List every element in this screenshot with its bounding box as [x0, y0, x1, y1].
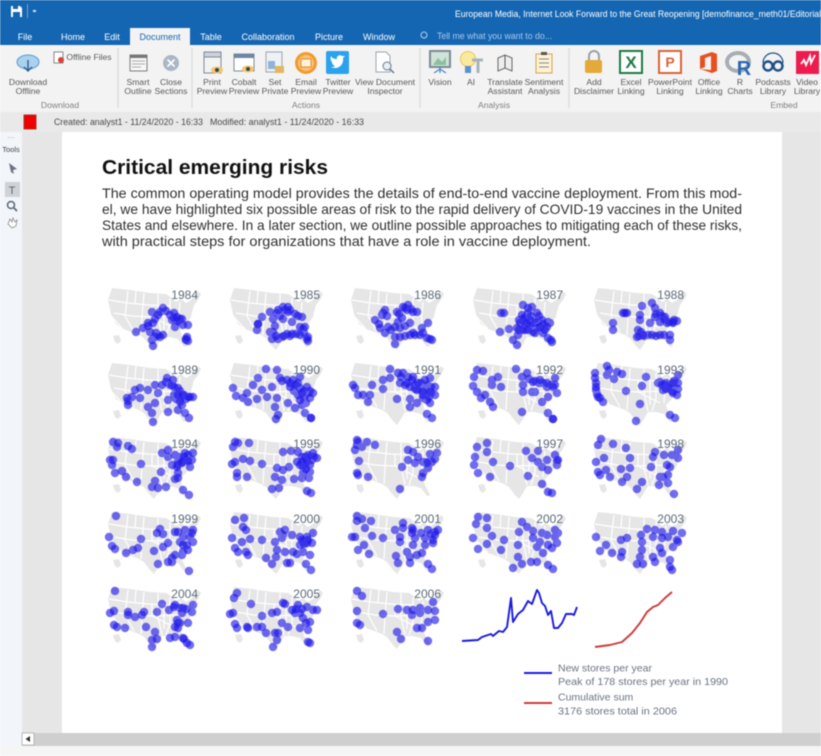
map: 1996 [351, 437, 444, 499]
ribbon labels: PowerPoint [648, 77, 693, 87]
tools panel: .... [7, 133, 15, 140]
ribbon labels: Vision [428, 77, 452, 87]
window title: European Media, Internet Look Forward to the Great Reopening [demofinance_meth01/Editorial [455, 9, 821, 19]
tools panel [0, 132, 22, 756]
map: 1986 [351, 288, 444, 350]
map: 2003: 2003 [657, 512, 684, 526]
map: 1997: 1997 [536, 437, 563, 451]
legend [524, 662, 728, 718]
map: 1996: 1996 [414, 437, 441, 451]
map: 2002: 2002 [536, 512, 563, 526]
icon: sentiment analysis [536, 52, 552, 73]
ribbon labels: Sentiment [525, 77, 564, 87]
icon: save [11, 4, 36, 18]
icon: add disclaimer [585, 51, 602, 73]
icon: video library [796, 51, 819, 74]
ribbon [0, 45, 821, 112]
status bar: Created: analyst1 - 11/24/2020 - 16:33 [54, 117, 203, 127]
map: 2005 [230, 587, 323, 649]
ribbon labels: Sections [155, 86, 187, 96]
map: 2000 [230, 512, 323, 574]
status bar [0, 112, 821, 132]
body text: States and elsewhere. In a later section, we outline possible approaches to mitigating each of these risks, [102, 218, 742, 233]
map: 1987: 1987 [536, 288, 563, 302]
menu tabs: Table [200, 32, 222, 42]
menu tabs: Picture [315, 32, 343, 42]
horizontal scrollbar [0, 733, 821, 756]
icon: text tool [5, 182, 20, 197]
map: 1990 [230, 363, 323, 425]
ribbon labels: Close [160, 77, 182, 87]
map: 2001: 2001 [414, 512, 441, 526]
ribbon labels: Charts [727, 86, 753, 96]
ribbon labels: Preview [323, 86, 354, 96]
map: 2000: 2000 [293, 512, 320, 526]
map: 2006: 2006 [414, 587, 441, 601]
ribbon labels: Email [295, 77, 317, 87]
map: 1994: 1994 [171, 437, 198, 451]
body text: The common operating model provides the details of end-to-end vaccine deployment. From this mod- [102, 186, 742, 201]
map: 1997 [473, 437, 566, 499]
page area [62, 132, 782, 733]
ribbon labels: Excel [620, 77, 642, 87]
body text: el, we have highlighted six possible areas of risk to the rapid delivery of COVID-19 vaccines in the United [102, 202, 742, 217]
ribbon labels: Assistant [488, 86, 523, 96]
ribbon labels: Cobalt [232, 77, 257, 87]
ribbon labels: Analysis [528, 86, 560, 96]
icon: pointer [9, 163, 17, 174]
ribbon labels: Download [9, 77, 47, 87]
line chart: cumulative sum [595, 592, 672, 647]
map: 1987 [473, 288, 566, 350]
map: 2004 [108, 587, 201, 649]
ribbon labels: Actions [292, 100, 320, 110]
menu tabs: File [18, 32, 32, 42]
icon: excel: X [625, 53, 637, 72]
icon: email preview [295, 52, 317, 74]
map: 1986: 1986 [414, 288, 441, 302]
legend: Cumulative sum [558, 692, 634, 704]
ribbon labels: AI [467, 77, 475, 87]
map: 2004: 2004 [171, 587, 198, 601]
menu tabs: Edit [104, 32, 120, 42]
icon: translate assistant [498, 55, 512, 71]
map: 2006 [351, 587, 444, 649]
menu tabs: Document [139, 32, 181, 42]
icon: set private [266, 52, 284, 73]
heading: Critical emerging risks [102, 156, 328, 179]
map: 1999 [108, 512, 201, 574]
ribbon labels [9, 52, 821, 110]
map: 1989 [108, 363, 201, 425]
map: 1988: 1988 [657, 288, 684, 302]
ribbon labels: Disclaimer [574, 86, 614, 96]
body text: with practical steps for organizations that have a role in vaccine deployment. [101, 234, 591, 249]
menu tabs [18, 28, 552, 46]
ribbon labels: Library [760, 86, 787, 96]
ribbon labels: Office [698, 77, 720, 87]
ribbon labels: Podcasts [755, 77, 791, 87]
icon: close sections [163, 55, 179, 71]
map: 2001 [351, 512, 444, 574]
line chart: new stores per year [462, 590, 577, 641]
ribbon labels: Private [262, 86, 289, 96]
legend: New stores per year [558, 662, 652, 674]
menu tabs: Window [363, 32, 396, 42]
map: 2003 [594, 512, 687, 574]
icon: magnifier [8, 202, 17, 211]
map: 1993 [594, 363, 687, 425]
map: 1991: 1991 [414, 363, 441, 377]
map: 2005: 2005 [293, 587, 320, 601]
map: 1985 [230, 288, 323, 350]
icon: text tool: T [9, 185, 16, 197]
icon: download cloud [17, 55, 39, 71]
ribbon labels: Set [269, 77, 282, 87]
icon: smart outline [130, 55, 147, 71]
icon: print preview [204, 52, 223, 74]
map: 1990: 1990 [293, 363, 320, 377]
icon: cobalt preview [234, 54, 254, 72]
ribbon labels: Linking [656, 86, 684, 96]
ribbon labels: Offline [16, 86, 41, 96]
map: 1995: 1995 [293, 437, 320, 451]
ribbon labels: View Document [355, 77, 416, 87]
map: 1985: 1985 [293, 288, 320, 302]
ribbon labels: Analysis [478, 100, 510, 110]
icon: excel [620, 51, 642, 73]
icon: vision [430, 51, 450, 73]
icon: AI [460, 52, 483, 73]
legend: 3176 stores total in 2006 [558, 706, 677, 718]
map: 1998 [594, 437, 687, 499]
map: 1989: 1989 [171, 363, 198, 377]
map: 2002 [473, 512, 566, 574]
ribbon labels: Embed [770, 100, 798, 110]
ribbon labels: Outline [124, 86, 152, 96]
ribbon labels: Twitter [325, 77, 351, 87]
legend: Peak of 178 stores per year in 1990 [558, 676, 728, 688]
menu tabs: Collaboration [241, 32, 295, 42]
icon: powerpoint: P [665, 54, 675, 70]
icon: twitter [326, 51, 349, 74]
icon: office [700, 52, 717, 73]
ribbon labels: Preview [229, 86, 260, 96]
map: 1984 [108, 288, 201, 350]
map: 1993: 1993 [657, 363, 684, 377]
ribbon labels: Offline Files [66, 52, 112, 62]
map: 1994 [108, 437, 201, 499]
ribbon labels: Preview [291, 86, 322, 96]
icon: R: R [737, 58, 752, 80]
ribbon labels: Preview [197, 86, 228, 96]
map: 1992: 1992 [536, 363, 563, 377]
map: 1998: 1998 [657, 437, 684, 451]
map: 1984: 1984 [171, 288, 198, 302]
ribbon labels: R [737, 77, 743, 87]
ribbon labels: Smart [127, 77, 150, 87]
ribbon labels: Linking [617, 86, 645, 96]
ribbon labels: Library [794, 86, 821, 96]
icon: R [727, 53, 752, 80]
status bar: Modified: analyst1 - 11/24/2020 - 16:33 [210, 117, 364, 127]
icon: document inspector [376, 52, 394, 73]
icon: offline files [54, 52, 64, 63]
ribbon labels: Add [586, 77, 602, 87]
icon: hand [8, 218, 17, 228]
ribbon labels: Inspector [367, 86, 403, 96]
menu tabs: Home [61, 32, 85, 42]
body text [101, 186, 742, 249]
icon: powerpoint [659, 51, 681, 73]
ribbon labels: Video [796, 77, 818, 87]
icon: podcasts [763, 53, 783, 70]
menu tabs: Tell me what you want to do... [437, 31, 552, 41]
title bar [0, 0, 821, 45]
ribbon labels: Translate [487, 77, 523, 87]
map: 1988 [594, 288, 687, 350]
ribbon labels: Linking [695, 86, 723, 96]
map: 1992 [473, 363, 566, 425]
map: 1999: 1999 [171, 512, 198, 526]
tools panel: Tools [2, 145, 20, 154]
map: 1995 [230, 437, 323, 499]
ribbon labels: Print [203, 77, 221, 87]
ribbon labels: Download [41, 100, 79, 110]
map: 1991 [351, 363, 444, 425]
